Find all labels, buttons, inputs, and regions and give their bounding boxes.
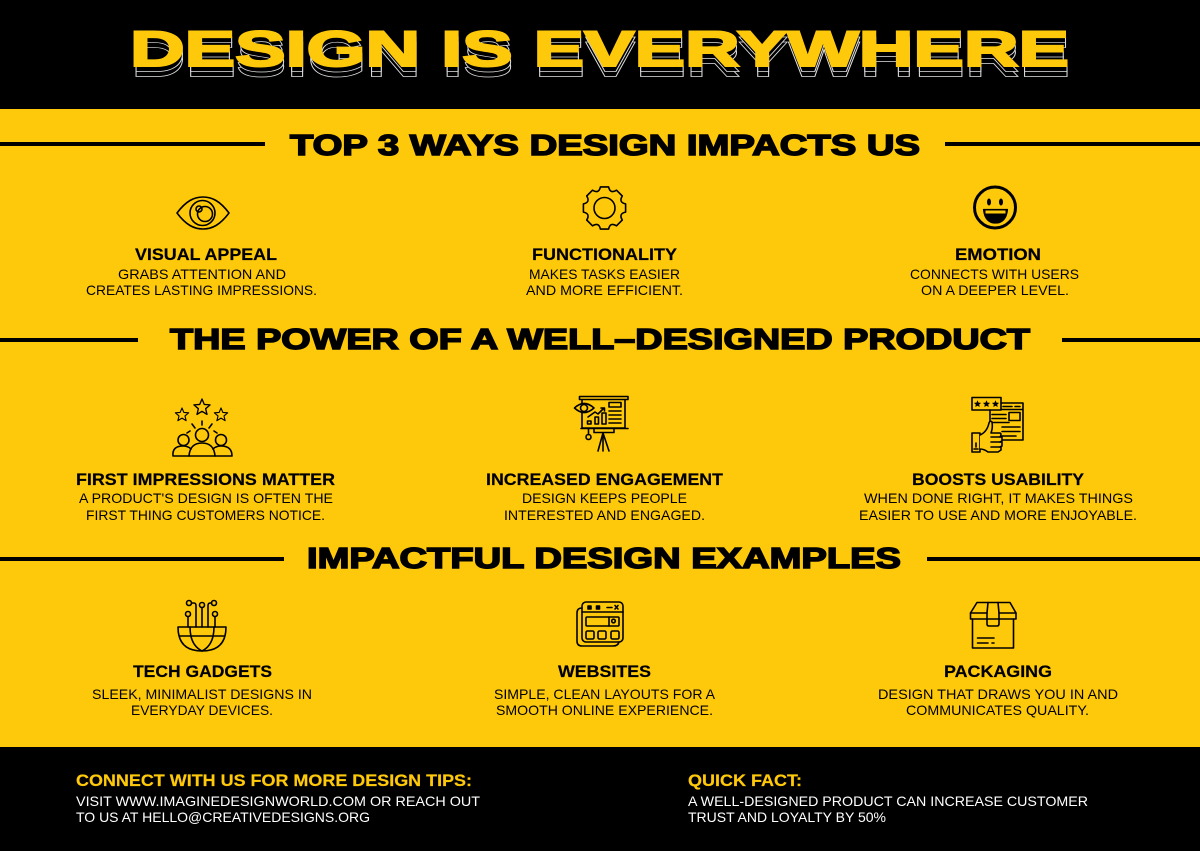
title: DESIGN IS EVERYWHERE [130, 20, 1069, 77]
text: increased engagement description: INTERESTED AND ENGAGED. [504, 507, 705, 523]
icon: gear [583, 187, 626, 229]
icon: presentation board [574, 396, 628, 451]
title: boosts usability: BOOSTS USABILITY [912, 470, 1085, 489]
text: functionality description: AND MORE EFFICIENT. [526, 282, 683, 298]
text: visual appeal description: CREATES LASTING IMPRESSIONS. [86, 282, 317, 298]
item: functionality [526, 187, 683, 298]
item: websites [494, 602, 716, 718]
footer text: contact details: VISIT WWW.IMAGINEDESIGNWORLD.COM OR REACH OUT [76, 793, 480, 809]
icon: rating and thumbs up [972, 398, 1023, 452]
text: increased engagement description: DESIGN KEEPS PEOPLE [522, 490, 687, 506]
item: packaging [878, 602, 1118, 718]
text: packaging description [878, 686, 1118, 718]
text: functionality description [526, 266, 683, 298]
text: visual appeal description [86, 266, 317, 298]
text: first impressions description [79, 490, 333, 523]
text: boosts usability description: EASIER TO USE AND MORE ENJOYABLE. [859, 507, 1137, 523]
text: websites description: SIMPLE, CLEAN LAYOUTS FOR A [494, 686, 716, 702]
text: boosts usability description [859, 490, 1137, 523]
title: DESIGN IS EVERYWHERE [131, 30, 1070, 88]
title: first impressions: FIRST IMPRESSIONS MATTER [76, 470, 335, 489]
heading: top 3 ways [0, 130, 1200, 162]
text: packaging description: COMMUNICATES QUALITY. [906, 702, 1089, 718]
title: DESIGN IS EVERYWHERE [131, 26, 1070, 82]
section 3: design examples [0, 543, 1200, 718]
title: websites: WEBSITES [558, 662, 651, 681]
text: functionality description: MAKES TASKS EASIER [529, 266, 680, 282]
footer text: quick fact details [688, 793, 1088, 825]
heading: power of design [0, 324, 1200, 356]
icon: circuit globe [178, 600, 226, 651]
item: tech gadgets [92, 600, 312, 718]
icon: stars and people [173, 399, 232, 456]
text: boosts usability description: WHEN DONE RIGHT, IT MAKES THINGS [864, 490, 1133, 506]
footer: connect [76, 771, 480, 825]
heading: power of design: THE POWER OF A WELL–DESIGNED PRODUCT [170, 324, 1030, 356]
header band [0, 0, 1200, 109]
icon: smiley [974, 187, 1016, 228]
heading: top 3 ways: TOP 3 WAYS DESIGN IMPACTS US [290, 130, 920, 162]
title: emotion: EMOTION [955, 245, 1041, 264]
text: tech gadgets description [92, 686, 312, 718]
item: visual appeal [86, 197, 317, 298]
title: visual appeal: VISUAL APPEAL [135, 245, 277, 264]
footer band [0, 747, 1200, 851]
text: increased engagement description [504, 490, 705, 523]
section 1: top 3 ways [0, 130, 1200, 298]
text: emotion description [910, 266, 1079, 298]
yellow main panel [0, 109, 1200, 747]
item: increased engagement [486, 396, 724, 523]
heading: impactful examples: IMPACTFUL DESIGN EXAMPLES [307, 543, 901, 575]
item: first impressions [76, 399, 335, 523]
title: packaging: PACKAGING [944, 662, 1052, 681]
text: tech gadgets description: SLEEK, MINIMALIST DESIGNS IN [92, 686, 312, 702]
title [130, 20, 1070, 88]
text: packaging description: DESIGN THAT DRAWS YOU IN AND [878, 686, 1118, 702]
footer: quick fact [688, 771, 1088, 825]
item: emotion [910, 187, 1079, 298]
text: first impressions description: A PRODUCT'S DESIGN IS OFTEN THE [79, 490, 333, 506]
text: emotion description: ON A DEEPER LEVEL. [921, 282, 1069, 298]
item: boosts usability [859, 398, 1137, 523]
text: first impressions description: FIRST THING CUSTOMERS NOTICE. [86, 507, 325, 523]
footer heading: quick fact: QUICK FACT: [688, 771, 802, 790]
footer text: quick fact details: TRUST AND LOYALTY BY 50% [688, 809, 886, 825]
icon: eye [177, 197, 229, 229]
title: tech gadgets: TECH GADGETS [133, 662, 272, 681]
text: emotion description: CONNECTS WITH USERS [910, 266, 1079, 282]
text: visual appeal description: GRABS ATTENTION AND [118, 266, 286, 282]
text: websites description: SMOOTH ONLINE EXPERIENCE. [496, 702, 713, 718]
title: increased engagement: INCREASED ENGAGEMENT [486, 470, 724, 489]
icon: box [970, 602, 1016, 648]
footer text: contact details [76, 793, 480, 825]
title: functionality: FUNCTIONALITY [532, 245, 678, 264]
heading: impactful examples [0, 543, 1200, 575]
section 2: well-designed product [0, 324, 1200, 523]
icon: browser windows [577, 602, 623, 646]
footer text: quick fact details: A WELL-DESIGNED PRODUCT CAN INCREASE CUSTOMER [688, 793, 1088, 809]
footer text: contact details: TO US AT HELLO@CREATIVEDESIGNS.ORG [76, 809, 370, 825]
text: websites description [494, 686, 716, 718]
footer heading: connect: CONNECT WITH US FOR MORE DESIGN TIPS: [76, 771, 472, 790]
text: tech gadgets description: EVERYDAY DEVICES. [131, 702, 273, 718]
